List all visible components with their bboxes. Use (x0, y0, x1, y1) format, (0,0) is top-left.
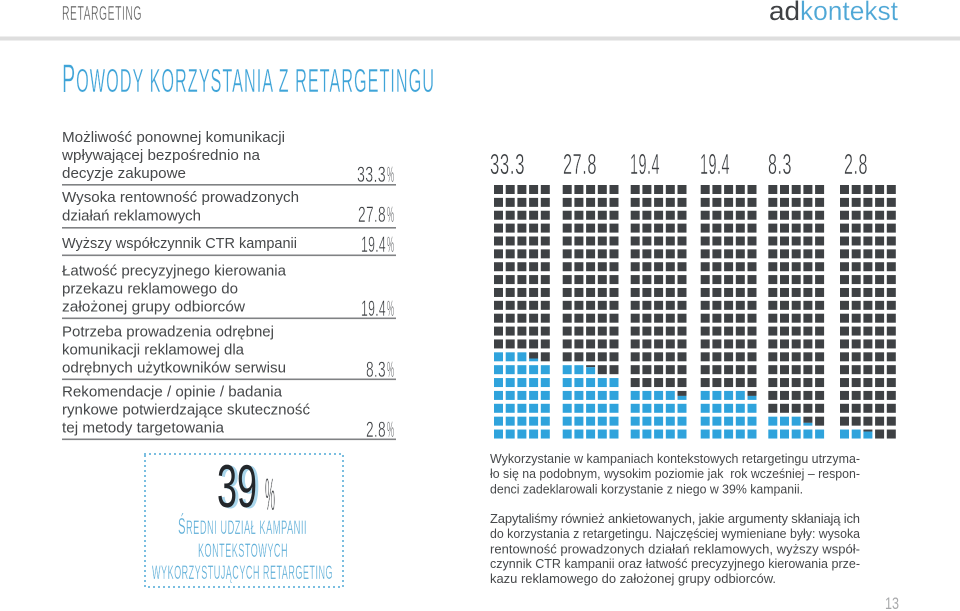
reason 6: Rekomendacje / opinie / badania (62, 384, 283, 400)
reason 4: założonej grupy odbiorców (62, 298, 245, 316)
section label: RETARGETING (62, 3, 142, 25)
reason 2 (62, 189, 396, 229)
paragraph 1: denci zadeklarowali korzystanie z niego w 39% kampanii. (490, 482, 803, 496)
callout: 39 percent: WYKORZYSTUJĄCYCH RETARGETING (152, 563, 333, 584)
reason 5: odrębnych użytkowników serwisu (62, 360, 286, 376)
reason 6: tej metody targetowania (62, 420, 225, 436)
pictogram column 19.4 (631, 185, 686, 439)
reason 5: Potrzeba prowadzenia odrębnej (62, 324, 274, 340)
reason 5 (62, 324, 396, 382)
title: POWODY KORZYSTANIA Z RETARGETINGU (62, 57, 435, 101)
pictogram column 19.4 second (701, 185, 756, 439)
callout caption (152, 512, 333, 584)
reason 3: 19.4 (361, 232, 386, 257)
paragraph 2: kazu reklamowego do założonej grupy odbiorców. (490, 571, 776, 586)
text: % (387, 296, 394, 321)
text: % (387, 162, 394, 187)
text: % (387, 232, 394, 257)
callout caption: KONTEKSTOWYCH (198, 541, 288, 562)
paragraph 2: Zapytaliśmy również ankietowanych, jakie argumenty skłaniają ich (490, 511, 860, 526)
paragraph 2 (490, 511, 861, 586)
pictogram column 33.3 (494, 185, 550, 439)
reason 1: Możliwość ponownej komunikacji (62, 129, 285, 146)
pictogram column 27.8 (563, 185, 618, 439)
reason 1: decyzje zakupowe (62, 165, 186, 182)
column headings: 8.3 (768, 149, 792, 181)
reason 3: Wyższy współczynnik CTR kampanii (62, 235, 297, 252)
reason 6 (62, 384, 396, 442)
reason 4: przekazu reklamowego do (62, 280, 238, 298)
paragraph 2: do korzystania z retargetingu. Najczęściej wymieniane były: wysoka (490, 526, 861, 541)
big number: 39 (217, 453, 257, 520)
reason 1: 33.3 (357, 162, 386, 187)
reason 5: 8.3 (366, 357, 386, 382)
pictogram column 2.8 (840, 185, 896, 439)
reason 4: Łatwość precyzyjnego kierowania (62, 262, 287, 280)
reason 2: Wysoka rentowność prowadzonych (62, 189, 299, 206)
column headings: 27.8 (563, 149, 597, 181)
column headings: 19.4 (700, 149, 730, 181)
text: % (387, 417, 394, 442)
column headings: 33.3 (490, 149, 525, 181)
reason 6: 2.8 (366, 417, 386, 442)
reason 3 (62, 232, 396, 257)
reasons list (61, 129, 396, 442)
reason 1: wpływającej bezpośrednio na (61, 147, 261, 164)
paragraph 1: Wykorzystanie w kampaniach kontekstowych retargetingu utrzyma- (490, 451, 860, 466)
reason 5: komunikacji reklamowej dla (62, 342, 245, 358)
reason 2: działań reklamowych (62, 208, 201, 224)
column headings (490, 149, 868, 181)
column headings: 19.4 (630, 149, 660, 181)
text: % (387, 357, 394, 382)
reason 4 (62, 262, 396, 321)
reason 4: 19.4 (361, 296, 386, 321)
text: % (387, 202, 394, 227)
column headings: 2.8 (844, 149, 868, 181)
paragraph 2: rentowność prowadzonych działań reklamowych, wyższy współ- (490, 542, 860, 556)
pictogram column 8.3 (768, 185, 824, 439)
callout: 39 percent (145, 453, 343, 587)
callout: 39 percent: % (265, 468, 275, 520)
callout caption: ŚREDNI UDZIAŁ KAMPANII (178, 512, 307, 539)
paragraph 2: czynnik CTR kampanii oraz łatwość precyzyjnego kierowania prze- (490, 556, 860, 571)
reason 6: rynkowe potwierdzające skuteczność (62, 402, 310, 418)
paragraph 1 (490, 451, 860, 496)
reason 2: 27.8 (358, 202, 386, 227)
paragraph 1: ło się na podobnym, wysokim poziomie jak rok wcześniej – respon- (490, 466, 860, 481)
reason 1 (61, 129, 396, 187)
big number: 39 (220, 454, 260, 521)
